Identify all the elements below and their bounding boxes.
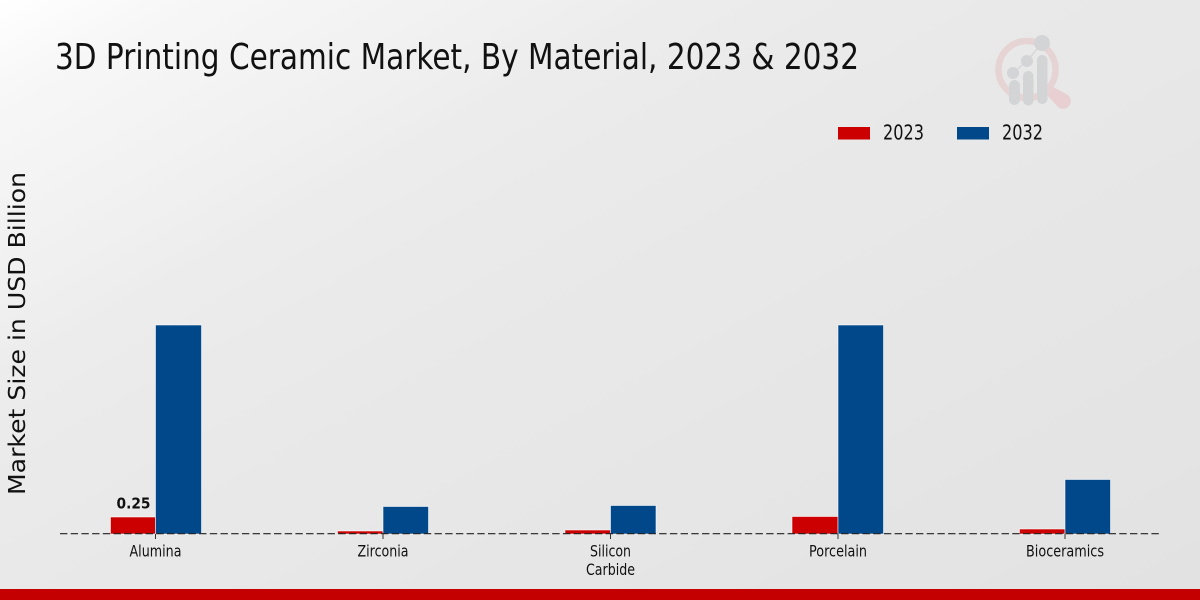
- bars: Silicon Carbide: [565, 506, 656, 534]
- legend: 2023: 2023: [883, 120, 924, 144]
- category labels: [130, 542, 1104, 579]
- icon: magnifier watermark logo: [998, 35, 1071, 109]
- bar chart: [60, 325, 1160, 579]
- category labels: Carbide: [586, 560, 635, 579]
- tick marks: [156, 534, 1065, 539]
- category labels: Zirconia: [358, 542, 408, 560]
- category labels: Bioceramics: [1026, 542, 1104, 560]
- data label: 0.25: [116, 494, 150, 512]
- baseline axis: [60, 533, 1160, 535]
- category labels: Alumina: [130, 542, 182, 560]
- bars: Bioceramics: [1020, 480, 1110, 534]
- category labels: Silicon: [590, 542, 631, 560]
- bars: Porcelain: [792, 325, 884, 534]
- legend: 2032: 2032: [1002, 120, 1043, 144]
- legend: 2023: [838, 120, 924, 144]
- y axis label: Market Size in USD Billion: [5, 172, 31, 495]
- legend: 2032: [957, 120, 1043, 144]
- footer bar: [0, 589, 1200, 600]
- title: 3D Printing Ceramic Market, By Material, 2023 & 2032: [55, 37, 859, 78]
- bars: Alumina: [110, 325, 202, 534]
- legend: [838, 120, 1043, 144]
- bars: Zirconia: [338, 506, 428, 534]
- category labels: Porcelain: [809, 542, 867, 560]
